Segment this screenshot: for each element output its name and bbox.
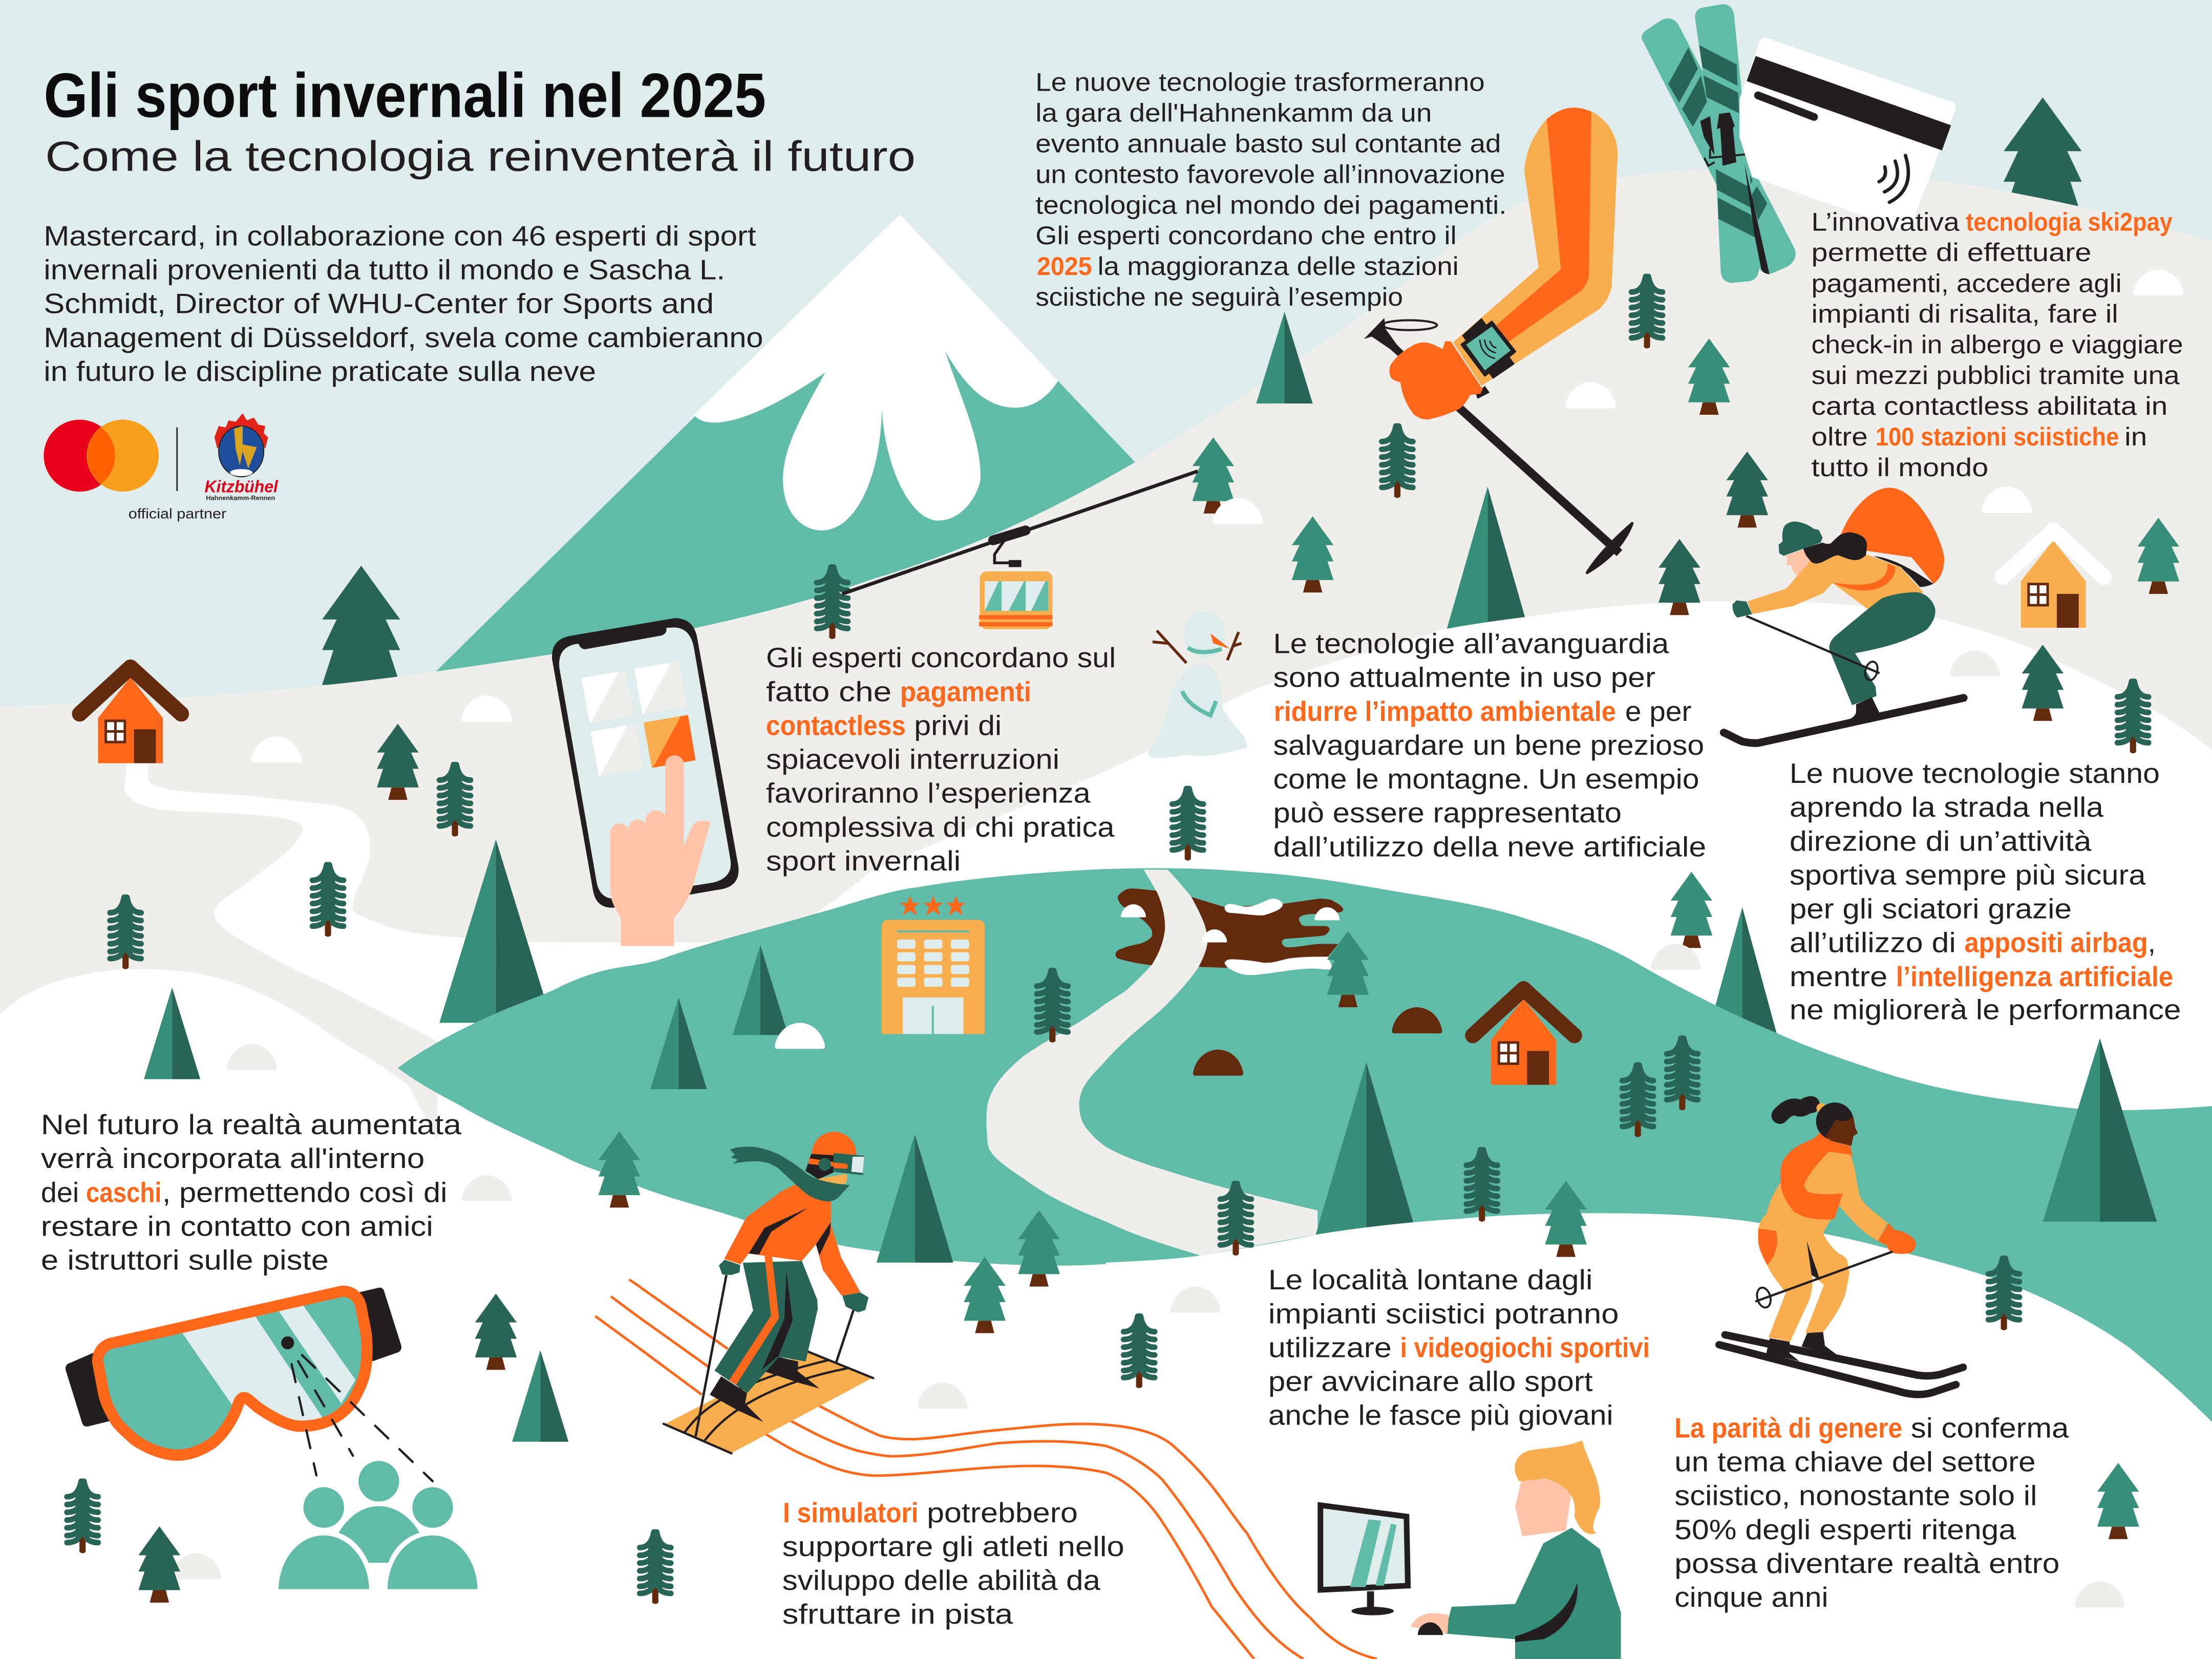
snowman	[1148, 611, 1247, 758]
house: left orange	[80, 667, 181, 763]
kitzbuhel logo: Kitzbühel	[204, 478, 279, 497]
text: ambiente: e per	[1625, 695, 1691, 727]
text: contactless: fatto che	[766, 675, 891, 707]
text: ski2pay: check-in in albergo e viaggiare	[1812, 330, 2183, 359]
mountain	[436, 215, 1213, 734]
female skier	[1719, 1102, 1963, 1394]
tree: fir on teal 1	[733, 945, 788, 1035]
ski goggles	[66, 1288, 433, 1481]
text: parita di genere: sciistico, nonostante solo il	[1674, 1480, 2037, 1512]
tree: fir center	[1445, 487, 1529, 633]
mastercard logo	[44, 420, 159, 492]
hat	[1779, 522, 1823, 556]
simulator board	[665, 1351, 872, 1453]
boots	[1766, 1332, 1838, 1362]
text: airbag: direzione di un’attività	[1790, 825, 2092, 857]
tree: pine over mound	[139, 1526, 180, 1603]
mitten	[1390, 341, 1483, 419]
text: Hahnenkamm: Le nuove tecnologie trasformeranno	[1035, 68, 1485, 97]
text: caschi: e istruttori sulle piste	[41, 1244, 329, 1276]
intro text: Management di Düsseldorf, svela come cambieranno	[44, 322, 763, 353]
vest	[1780, 1133, 1853, 1220]
phone tiles	[581, 662, 696, 776]
text: ski2pay: 100 stazioni sciistiche	[1876, 422, 2119, 451]
text: ambiente	[1273, 628, 1706, 862]
text: contactless	[766, 642, 1116, 877]
trees: spruces	[67, 276, 2149, 1604]
text: ski2pay: carta contactless abilitata in	[1812, 392, 2167, 420]
text: airbag: aprendo la strada nella	[1790, 791, 2103, 823]
ski pole	[1364, 318, 1632, 573]
contactless card	[1739, 37, 1956, 231]
text: ski2pay	[1812, 207, 2183, 482]
partner logos: official partner	[129, 506, 226, 522]
scarf	[730, 1146, 850, 1202]
intro text: Mastercard, in collaborazione con 46 esperti di sport	[44, 220, 756, 251]
text: videogiochi	[1268, 1264, 1650, 1431]
text: airbag: ,	[2148, 927, 2156, 959]
sleeve	[1453, 108, 1618, 386]
text: parita di genere: un tema chiave del settore	[1674, 1446, 2036, 1478]
text: simulatori: sviluppo delle abilità da	[782, 1564, 1100, 1596]
face	[1784, 549, 1810, 576]
brown ground patch	[1115, 888, 1343, 968]
hand	[610, 755, 710, 946]
hair	[1515, 1440, 1600, 1534]
text: parita di genere: si conferma	[1911, 1412, 2069, 1443]
text: airbag: appositi airbag	[1964, 927, 2148, 959]
projection dashes	[291, 1355, 433, 1481]
ponytail	[1780, 1104, 1812, 1115]
text: parita di genere	[1674, 1412, 2069, 1613]
text: simulatori	[782, 1497, 1124, 1630]
white front hill	[1106, 1213, 2212, 1659]
text: ski2pay: impianti di risalita, fare il	[1812, 300, 2118, 328]
intro text: invernali provenienti da tutto il mondo e Sascha L.	[44, 254, 725, 286]
gray ski run on teal hill	[987, 870, 1317, 1256]
text: simulatori: supportare gli atleti nello	[782, 1530, 1124, 1562]
text: airbag: all’utilizzo di	[1790, 927, 1956, 959]
text: airbag: l’intelligenza artificiale	[1896, 961, 2173, 992]
tree: fir right teal	[2043, 1038, 2157, 1222]
title: Gli sport invernali nel 2025	[44, 60, 766, 131]
text: Hahnenkamm: la maggioranza delle stazioni	[1097, 252, 1459, 281]
text: caschi: verrà incorporata all'interno	[41, 1142, 424, 1174]
text: videogiochi: anche le fasce più giovani	[1268, 1399, 1613, 1431]
airbag skier	[1724, 487, 1964, 743]
text: ambiente: può essere rappresentato	[1273, 797, 1622, 828]
text: contactless: contactless	[766, 709, 906, 741]
ski left	[1642, 18, 1796, 273]
snow on brown patch	[1121, 899, 1339, 975]
white road and lower snow	[124, 601, 2212, 1659]
text: contactless: spiacevoli interruzioni	[766, 743, 1059, 775]
intro text: in futuro le discipline praticate sulla neve	[44, 355, 596, 387]
text: Hahnenkamm: sciistiche ne seguirà l’esempio	[1035, 283, 1403, 311]
tree: fir bottom left	[512, 1350, 568, 1442]
text: ski2pay: L’innovativa	[1812, 207, 1960, 236]
gondola cabin	[979, 571, 1052, 629]
hair	[1803, 533, 1867, 564]
nfc icon	[1879, 156, 1908, 202]
text: parita di genere: cinque anni	[1674, 1581, 1828, 1613]
skis	[1642, 4, 1796, 283]
house: center orange	[1473, 989, 1575, 1085]
text: Hahnenkamm: Gli esperti concordano che entro il	[1035, 221, 1457, 250]
text: contactless: privi di	[914, 709, 1002, 741]
arm with watch and ski pole	[1364, 108, 1632, 573]
text: airbag: mentre	[1790, 961, 1887, 992]
ski poles	[696, 1275, 855, 1436]
text: videogiochi: Le località lontane dagli	[1268, 1264, 1593, 1295]
text: Hahnenkamm: 2025	[1037, 252, 1092, 281]
tree: large dark left	[322, 566, 400, 708]
text: Hahnenkamm: tecnologica nel mondo dei pagamenti.	[1035, 190, 1506, 219]
body	[1758, 1152, 1888, 1342]
tree: fir lower left	[144, 988, 200, 1079]
text: ambiente: dall’utilizzo della neve artificiale	[1273, 831, 1706, 862]
text: caschi: dei	[41, 1176, 79, 1208]
mountain snow cap	[694, 215, 1058, 530]
torso	[1444, 1528, 1621, 1659]
intro text: Schmidt, Director of WHU-Center for Sports and	[44, 288, 714, 320]
ski	[1724, 698, 1964, 743]
text: contactless: complessiva di chi pratica	[766, 811, 1115, 843]
text: videogiochi: impianti sciistici potranno	[1268, 1298, 1619, 1329]
text: simulatori: potrebbero	[927, 1497, 1078, 1528]
text: contactless: Gli esperti concordano sul	[766, 642, 1116, 673]
tree: fir top	[1256, 312, 1313, 403]
smartwatch	[1462, 318, 1515, 379]
text: ski2pay: tutto il mondo	[1812, 453, 1988, 482]
kitzbuhel logo	[204, 413, 279, 502]
front boot	[710, 1376, 763, 1422]
hand and mouse	[1411, 1613, 1449, 1633]
text: airbag	[1790, 757, 2181, 1026]
tree: fir center teal	[1314, 1062, 1418, 1240]
tree: large dark top right	[2004, 97, 2082, 240]
tree: fir left	[439, 839, 552, 1023]
text: contactless: pagamenti	[900, 675, 1031, 707]
text: videogiochi: i videogiochi sportivi	[1400, 1331, 1650, 1363]
text: caschi	[41, 1109, 461, 1276]
ski tracks	[595, 1280, 1377, 1659]
text: Hahnenkamm: la gara dell'Hahnenkamm da un	[1035, 98, 1432, 127]
partner logos	[44, 413, 279, 522]
face	[1515, 1477, 1573, 1536]
text: parita di genere: La parità di genere	[1674, 1412, 1902, 1443]
text: parita di genere: possa diventare realtà entro	[1674, 1547, 2059, 1579]
rear boot	[762, 1357, 819, 1389]
jacket	[1747, 554, 1924, 614]
airbag	[1840, 487, 1944, 584]
text: ski2pay: tecnologia ski2pay	[1966, 207, 2173, 236]
man at computer	[1321, 1440, 1621, 1659]
text: Hahnenkamm: un contesto favorevole all’innovazione	[1035, 160, 1505, 188]
subtitle: Come la tecnologia reinventerà il futuro	[45, 132, 916, 180]
text: caschi: restare in contatto con amici	[41, 1210, 433, 1242]
text: ski2pay: in	[2124, 422, 2147, 451]
text: videogiochi: per avvicinare allo sport	[1268, 1366, 1593, 1397]
glove	[1733, 601, 1752, 618]
text: airbag: sportiva sempre più sicura	[1790, 859, 2146, 890]
text: airbag: Le nuove tecnologie stanno	[1790, 757, 2160, 789]
text: ambiente: come le montagne. Un esempio	[1273, 763, 1699, 795]
text: caschi: Nel futuro la realtà aumentata	[41, 1109, 461, 1140]
text: ambiente: Le tecnologie all’avanguardia	[1273, 628, 1669, 660]
text: ambiente: ridurre l’impatto ambientale	[1274, 695, 1616, 727]
gloves	[719, 1260, 868, 1312]
white hill left	[0, 969, 706, 1659]
pants	[1829, 592, 1936, 705]
text: caschi: caschi	[86, 1176, 161, 1208]
pole	[1747, 616, 1880, 673]
jacket	[724, 1184, 861, 1295]
house: right snow roof	[2003, 530, 2104, 628]
tree: fir by airbag text	[1707, 907, 1777, 1035]
head and goggles	[812, 1132, 856, 1157]
boot	[1848, 697, 1880, 720]
text: ski2pay: oltre	[1812, 422, 1868, 451]
phone with hand	[552, 618, 738, 946]
skis	[1725, 1335, 1963, 1376]
kitzbuhel logo: Hahnenkamm-Rennen	[206, 495, 275, 502]
snow mounds	[171, 269, 2183, 1607]
mitten	[1878, 1223, 1916, 1254]
text: ambiente: sono attualmente in uso per	[1273, 662, 1655, 693]
ski binding	[1700, 113, 1736, 166]
text: Hahnenkamm: evento annuale basto sul contante ad	[1035, 130, 1501, 158]
monitor	[1321, 1505, 1408, 1615]
text: ski2pay: pagamenti, accedere agli	[1812, 269, 2122, 297]
people icon	[279, 1461, 478, 1589]
text: caschi: , permettendo così di	[162, 1176, 447, 1208]
text: ski2pay: permette di effettuare	[1812, 238, 2091, 267]
legs	[714, 1261, 818, 1393]
cable car	[842, 471, 1198, 629]
text: Hahnenkamm	[1035, 68, 1506, 311]
text: contactless: favoriranno l’esperienza	[766, 777, 1091, 809]
text: simulatori: sfruttare in pista	[782, 1598, 1013, 1630]
head	[1816, 1102, 1854, 1140]
hotel	[882, 896, 985, 1034]
text: airbag: ne migliorerà le performance	[1790, 994, 2181, 1026]
male skier on simulator	[664, 1132, 873, 1453]
teal hill	[398, 868, 2212, 1467]
text: parita di genere: 50% degli esperti ritenga	[1674, 1514, 2016, 1545]
tree: fir on teal 2	[650, 997, 707, 1089]
tree: fir near skier	[877, 1134, 953, 1263]
text: airbag: per gli sciatori grazie	[1790, 893, 2072, 925]
pole	[1755, 1251, 1892, 1302]
text: contactless: sport invernali	[766, 845, 961, 877]
text: simulatori: I simulatori	[783, 1497, 919, 1528]
text: videogiochi: utilizzare	[1268, 1331, 1392, 1363]
ski right	[1695, 4, 1759, 283]
text: ski2pay: sui mezzi pubblici tramite una	[1812, 361, 2180, 390]
intro text	[44, 220, 763, 387]
pocket	[1758, 1228, 1777, 1265]
text: ambiente: salvaguardare un bene prezioso	[1273, 729, 1704, 761]
trees: pines	[139, 338, 2179, 1603]
